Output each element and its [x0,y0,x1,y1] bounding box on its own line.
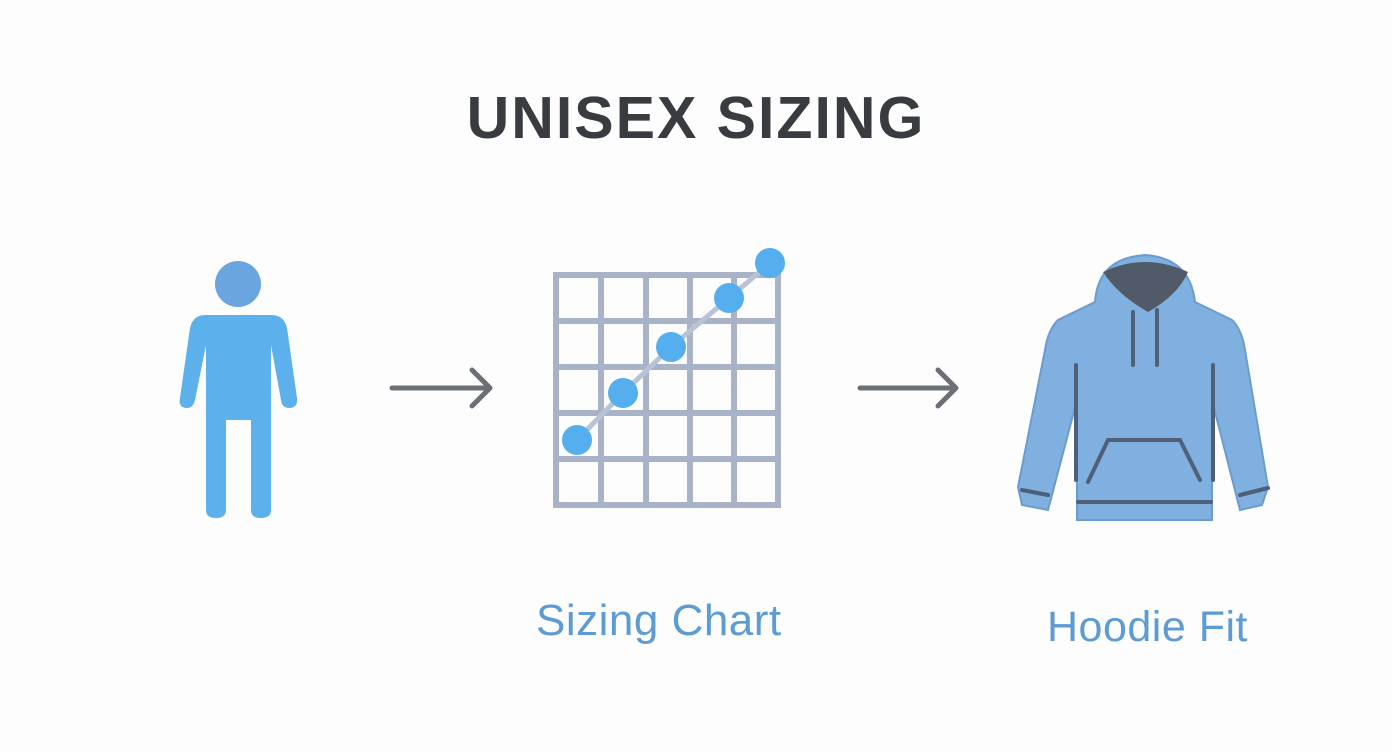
label: sizing chart: Sizing Chart [536,596,782,645]
arrow 1 [392,370,490,406]
icon: person [180,261,297,518]
title: UNISEX SIZING [467,85,925,151]
chart: sizing grid [556,248,785,505]
label: hoodie fit: Hoodie Fit [1047,603,1248,651]
arrow 2 [860,370,956,406]
icon: hoodie [1018,255,1268,520]
